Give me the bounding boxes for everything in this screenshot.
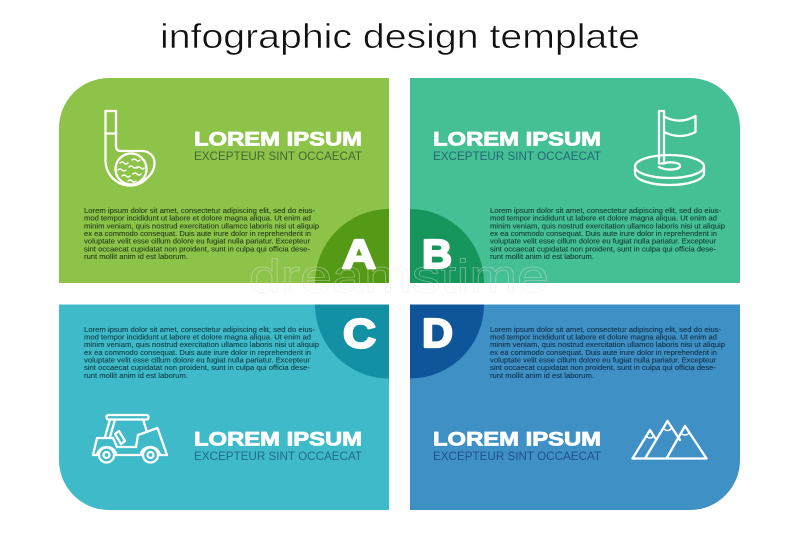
heading C: LOREM IPSUM	[194, 428, 362, 450]
subheading B: EXCEPTEUR SINT OCCAECAT	[433, 149, 601, 163]
body text D: sint occaecat cupidatat non proident, sunt in culpa qui officia dese-	[490, 363, 716, 372]
body text B: Lorem ipsum dolor sit amet, consectetur adipiscing elit, sed do eius-	[490, 206, 721, 215]
icon: golf flag on green	[635, 111, 704, 185]
body text B: ex ea commodo consequat. Duis aute irure dolor in reprehenderit in	[490, 229, 717, 238]
subheading A: EXCEPTEUR SINT OCCAECAT	[194, 149, 362, 163]
body text B	[490, 206, 725, 261]
body text B: voluptate velit esse cillum dolore eu fugiat nulla pariatur. Excepteur	[490, 237, 716, 246]
body text D: Lorem ipsum dolor sit amet, consectetur adipiscing elit, sed do eius-	[490, 325, 721, 334]
badge: C quadrant	[315, 304, 389, 378]
body text A: sint occaecat cupidatat non proident, sunt in culpa qui officia dese-	[84, 244, 310, 253]
subheading D: EXCEPTEUR SINT OCCAECAT	[433, 449, 601, 463]
body text A: Lorem ipsum dolor sit amet, consectetur adipiscing elit, sed do eius-	[84, 206, 315, 215]
body text A	[84, 206, 319, 261]
letter A: A	[342, 231, 376, 277]
body text C	[84, 325, 319, 380]
body text A: runt mollit anim id est laborum.	[84, 252, 188, 261]
badge: A quadrant	[315, 209, 389, 283]
body text A: minim veniam, quis nostrud exercitation ullamco laboris nisi ut aliquip	[84, 221, 319, 230]
body text C: runt mollit anim id est laborum.	[84, 371, 188, 380]
badge: D quadrant	[410, 304, 484, 378]
heading D: LOREM IPSUM	[433, 428, 601, 450]
watermark: dreamstime	[249, 250, 549, 302]
body text C: mod tempor incididunt ut labore et dolore magna aliqua. Ut enim ad	[84, 332, 311, 342]
panel: A	[59, 78, 389, 283]
subheading C: EXCEPTEUR SINT OCCAECAT	[194, 449, 362, 463]
body text C: voluptate velit esse cillum dolore eu fugiat nulla pariatur. Excepteur	[84, 356, 310, 364]
letter D: D	[422, 310, 453, 356]
heading A: LOREM IPSUM	[194, 128, 362, 150]
body text A: voluptate velit esse cillum dolore eu fugiat nulla pariatur. Excepteur	[84, 237, 310, 246]
body text A: ex ea commodo consequat. Duis aute irure dolor in reprehenderit in	[84, 229, 311, 238]
body text C: minim veniam, quis nostrud exercitation ullamco laboris nisi ut aliquip	[84, 340, 319, 349]
body text B: mod tempor incididunt ut labore et dolore magna aliqua. Ut enim ad	[490, 214, 717, 223]
body text C: Lorem ipsum dolor sit amet, consectetur adipiscing elit, sed do eius-	[84, 325, 315, 334]
heading B: LOREM IPSUM	[433, 128, 601, 150]
body text D: voluptate velit esse cillum dolore eu fugiat nulla pariatur. Excepteur	[490, 356, 716, 364]
body text B: runt mollit anim id est laborum.	[490, 252, 594, 261]
title: infographic design template	[160, 18, 640, 56]
letter C: C	[343, 310, 376, 356]
icon: golf club and ball	[106, 111, 154, 186]
panel: B	[410, 78, 740, 283]
body text D: mod tempor incididunt ut labore et dolore magna aliqua. Ut enim ad	[490, 332, 717, 342]
body text B: minim veniam, quis nostrud exercitation ullamco laboris nisi ut aliquip	[490, 221, 725, 230]
badge: B quadrant	[410, 209, 484, 283]
body text A: mod tempor incididunt ut labore et dolore magna aliqua. Ut enim ad	[84, 214, 311, 223]
body text C: ex ea commodo consequat. Duis aute irure dolor in reprehenderit in	[84, 348, 311, 357]
panel: D	[410, 304, 740, 510]
body text B: sint occaecat cupidatat non proident, sunt in culpa qui officia dese-	[490, 244, 716, 253]
body text D: minim veniam, quis nostrud exercitation ullamco laboris nisi ut aliquip	[490, 340, 725, 349]
icon: golf cart	[93, 415, 167, 462]
body text C: sint occaecat cupidatat non proident, sunt in culpa qui officia dese-	[84, 363, 310, 372]
panel: C	[59, 304, 389, 510]
icon: mountains	[632, 421, 706, 458]
body text D	[490, 325, 725, 380]
letter B: B	[422, 231, 452, 277]
body text D: ex ea commodo consequat. Duis aute irure dolor in reprehenderit in	[490, 348, 717, 357]
body text D: runt mollit anim id est laborum.	[490, 371, 594, 380]
